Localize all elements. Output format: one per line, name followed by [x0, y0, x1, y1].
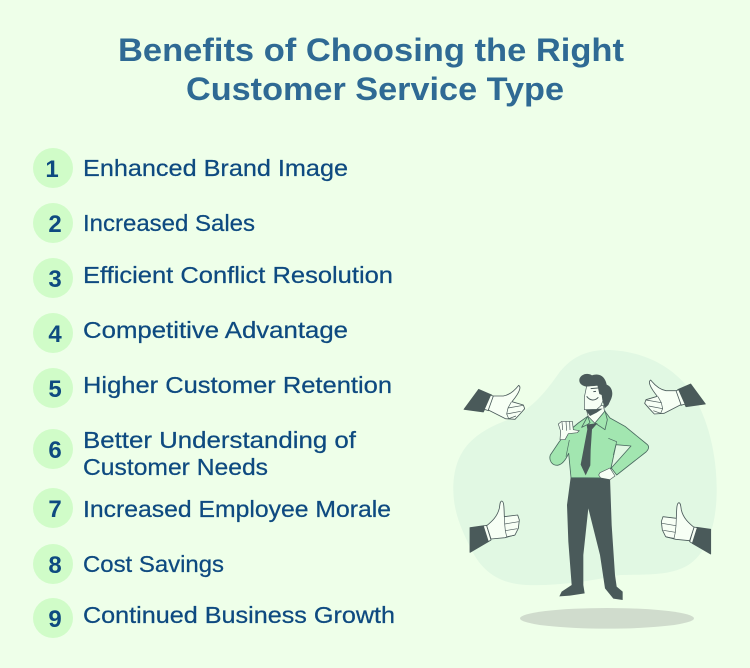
hand on hip [599, 468, 615, 480]
background blob [453, 350, 717, 585]
item 4 [33, 313, 348, 353]
neck [586, 405, 605, 423]
title [118, 32, 624, 107]
man [550, 374, 649, 600]
illustration [453, 350, 717, 629]
title: Customer Service Type [186, 71, 564, 107]
item 7: 7 [48, 496, 62, 523]
item 7 [33, 488, 391, 528]
thumbs up hand bottom right [661, 503, 711, 554]
item 6: Better Understanding of [83, 427, 357, 453]
item 1: Enhanced Brand Image [83, 155, 348, 181]
item 2: 2 [48, 211, 62, 238]
item 3 [33, 258, 393, 298]
item 2: Increased Sales [83, 210, 255, 236]
benefit list [33, 148, 395, 638]
item 8: Cost Savings [83, 551, 224, 577]
item 6: Customer Needs [83, 454, 268, 480]
item 8: 8 [48, 552, 62, 579]
item 4: 4 [48, 321, 62, 348]
item 4: Competitive Advantage [83, 317, 348, 343]
ground shadow [520, 608, 694, 629]
item 7: Increased Employee Morale [83, 496, 391, 522]
item 6: 6 [48, 437, 62, 464]
hand fingers [562, 422, 570, 431]
hair [579, 374, 612, 408]
item 9: 9 [48, 606, 62, 633]
trousers [559, 477, 623, 600]
item 3: 3 [48, 266, 62, 293]
item 6 [33, 427, 357, 480]
neck shadow [585, 409, 603, 416]
pointing hand [558, 421, 579, 440]
item 2 [33, 203, 255, 243]
tie [581, 423, 598, 475]
item 3: Efficient Conflict Resolution [83, 262, 393, 288]
shirt [550, 411, 649, 478]
thumbs up hand top right [645, 380, 705, 414]
thumbs up hand bottom left [470, 501, 519, 552]
head [584, 385, 604, 410]
thumbs up hand top left [464, 385, 525, 419]
item 1 [33, 148, 348, 188]
item 5: 5 [48, 376, 62, 403]
item 8 [33, 544, 224, 584]
collar [582, 411, 607, 430]
item 5: Higher Customer Retention [83, 372, 392, 398]
face details [587, 388, 598, 400]
item 1: 1 [45, 156, 59, 183]
arm fold [566, 438, 617, 457]
item 5 [33, 368, 392, 408]
title: Benefits of Choosing the Right [118, 32, 624, 68]
item 9: Continued Business Growth [83, 602, 395, 628]
item 9 [33, 598, 395, 638]
